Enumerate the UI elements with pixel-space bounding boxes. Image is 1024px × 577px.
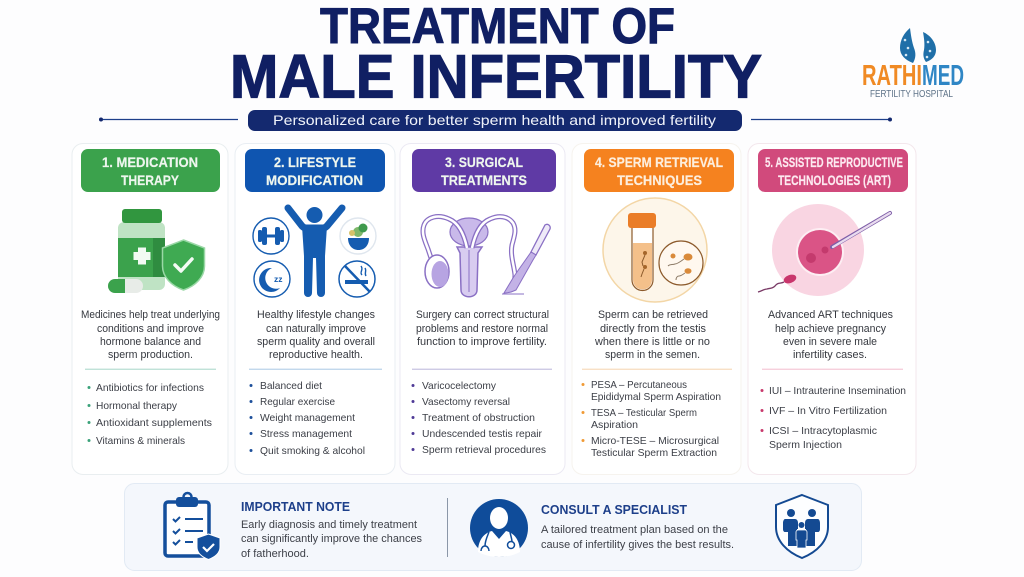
- list: surgical procedures: Undescended testis repair: [422, 429, 543, 440]
- text block: consult a specialist: cause of infertility gives the best results.: [541, 539, 734, 551]
- list: lifestyle changes: Weight management: [260, 413, 355, 424]
- heading: surgical treatments: TREATMENTS: [441, 172, 527, 188]
- icon: person with healthy habits: zz: [274, 274, 282, 284]
- text block: lifestyle description: can naturally improve: [266, 323, 366, 335]
- list: surgical procedures: Treatment of obstruction: [422, 413, 535, 424]
- icon: medicine bottle with shield: [108, 209, 204, 293]
- text block: important note: can significantly improve the chances: [241, 533, 422, 545]
- list: ART techniques: ICSI – Intracytoplasmic: [769, 426, 877, 437]
- icon: male reproductive anatomy and scalpel: [423, 217, 550, 297]
- list: retrieval techniques: TESA – Testicular Sperm: [591, 408, 697, 419]
- title: MALE INFERTILITY: [230, 42, 762, 110]
- list: lifestyle changes: Balanced diet: [260, 381, 322, 392]
- heading: sperm retrieval techniques: TECHNIQUES: [617, 172, 702, 188]
- text block: lifestyle description: sperm quality and overall: [257, 336, 375, 348]
- list: medication options: [88, 383, 212, 447]
- heading: lifestyle modification: MODIFICATION: [266, 172, 363, 188]
- heading: assisted reproductive technologies: [758, 149, 908, 192]
- text block: consult a specialist: CONSULT A SPECIALIST: [541, 503, 687, 517]
- text block: lifestyle description: [257, 309, 375, 361]
- title: [230, 0, 762, 110]
- subtitle banner: Personalized care for better sperm health and improved fertility: [273, 112, 716, 128]
- text block: consult a specialist: [541, 503, 734, 551]
- panel: medication therapy: [72, 144, 228, 474]
- icon: clipboard checklist with shield: [165, 493, 220, 560]
- text block: lifestyle description: Healthy lifestyle changes: [257, 309, 375, 321]
- panel: lifestyle modification: [235, 144, 395, 474]
- list: surgical procedures: Sperm retrieval procedures: [422, 445, 546, 456]
- heading: sperm retrieval techniques: 4. SPERM RETRIEVAL: [595, 154, 723, 170]
- text block: surgical description: problems and restore normal: [416, 323, 548, 335]
- text block: retrieval description: sperm in the semen.: [605, 349, 700, 361]
- list: ART techniques: IVF – In Vitro Fertilization: [769, 406, 887, 417]
- heading: surgical treatments: 3. SURGICAL: [445, 154, 523, 170]
- list: lifestyle changes: Quit smoking & alcohol: [260, 446, 365, 457]
- panel: surgical treatments: [400, 144, 565, 474]
- icon: test tube and sperm under magnifier: [603, 198, 707, 302]
- heading: lifestyle modification: [245, 149, 385, 192]
- text block: retrieval description: Sperm can be retrieved: [598, 309, 708, 321]
- text block: medication description: Medicines help treat underlying: [81, 309, 220, 321]
- text block: ART description: help achieve pregnancy: [775, 323, 887, 335]
- text block: ART description: Advanced ART techniques: [768, 309, 893, 321]
- list: retrieval techniques: Epididymal Sperm Aspiration: [591, 392, 721, 403]
- icon: family shield: [776, 495, 828, 558]
- list: retrieval techniques: Aspiration: [591, 420, 638, 431]
- text block: medication description: sperm production.: [108, 349, 193, 361]
- icon: person with healthy habits: [253, 207, 376, 297]
- heading: sperm retrieval techniques: [584, 149, 734, 192]
- list: ART techniques: Sperm Injection: [769, 440, 842, 451]
- heading: surgical treatments: [412, 149, 556, 192]
- text block: ART description: infertility cases.: [793, 349, 867, 361]
- heading: assisted reproductive technologies: 5. ASSISTED REPRODUCTIVE: [765, 154, 903, 170]
- logo: [862, 28, 964, 100]
- heading: medication therapy: 1. MEDICATION: [102, 154, 198, 170]
- heading: lifestyle modification: 2. LIFESTYLE: [274, 154, 356, 170]
- text block: surgical description: Surgery can correct structural: [416, 309, 549, 321]
- text block: surgical description: [416, 309, 549, 348]
- list: retrieval techniques: Micro-TESE – Microsurgical: [591, 436, 719, 447]
- heading: medication therapy: THERAPY: [121, 172, 180, 188]
- text block: retrieval description: directly from the testis: [600, 323, 706, 335]
- list: retrieval techniques: PESA – Percutaneous: [591, 380, 687, 391]
- subtitle banner: [99, 110, 892, 131]
- list: surgical procedures: Varicocelectomy: [422, 381, 497, 392]
- panel: assisted reproductive technologies: [748, 144, 916, 474]
- heading: assisted reproductive technologies: TECHNOLOGIES (ART): [778, 172, 891, 188]
- list: medication options: Antibiotics for infections: [96, 383, 204, 394]
- text block: important note: [241, 500, 422, 560]
- list: lifestyle changes: [250, 381, 365, 457]
- text block: important note: of fatherhood.: [241, 548, 309, 560]
- heading: medication therapy: [81, 149, 220, 192]
- text block: consult a specialist: A tailored treatment plan based on the: [541, 524, 728, 536]
- list: ART techniques: [760, 386, 906, 451]
- text block: ART description: [768, 309, 893, 361]
- text block: important note: Early diagnosis and timely treatment: [241, 519, 417, 531]
- panel: sperm retrieval techniques: [572, 144, 741, 474]
- text block: medication description: conditions and improve: [97, 323, 204, 335]
- list: lifestyle changes: Regular exercise: [260, 397, 335, 408]
- list: medication options: Hormonal therapy: [96, 401, 178, 412]
- text block: important note: IMPORTANT NOTE: [241, 500, 350, 514]
- list: surgical procedures: [412, 381, 546, 456]
- icon: doctor: [470, 499, 528, 557]
- list: medication options: Vitamins & minerals: [96, 436, 185, 447]
- icon: egg with injection pipette and sperm: [758, 204, 890, 296]
- logo: RATHI: [862, 60, 922, 92]
- logo: FERTILITY HOSPITAL: [870, 88, 953, 100]
- text block: retrieval description: when there is little or no: [594, 336, 710, 348]
- text block: medication description: hormone balance and: [100, 336, 201, 348]
- text block: retrieval description: [594, 309, 710, 361]
- text block: surgical description: function to improve fertility.: [417, 336, 547, 348]
- list: medication options: Antioxidant supplements: [96, 418, 212, 429]
- list: surgical procedures: Vasectomy reversal: [422, 397, 510, 408]
- text block: ART description: even in severe male: [783, 336, 877, 348]
- list: retrieval techniques: [582, 380, 721, 459]
- list: ART techniques: IUI – Intrauterine Insemination: [769, 386, 906, 397]
- text block: medication description: [81, 309, 220, 361]
- logo: MED: [922, 60, 964, 92]
- panel: bottom notes: [124, 484, 862, 570]
- text block: lifestyle description: reproductive health.: [269, 349, 363, 361]
- list: retrieval techniques: Testicular Sperm Extraction: [591, 448, 717, 459]
- list: lifestyle changes: Stress management: [260, 429, 352, 440]
